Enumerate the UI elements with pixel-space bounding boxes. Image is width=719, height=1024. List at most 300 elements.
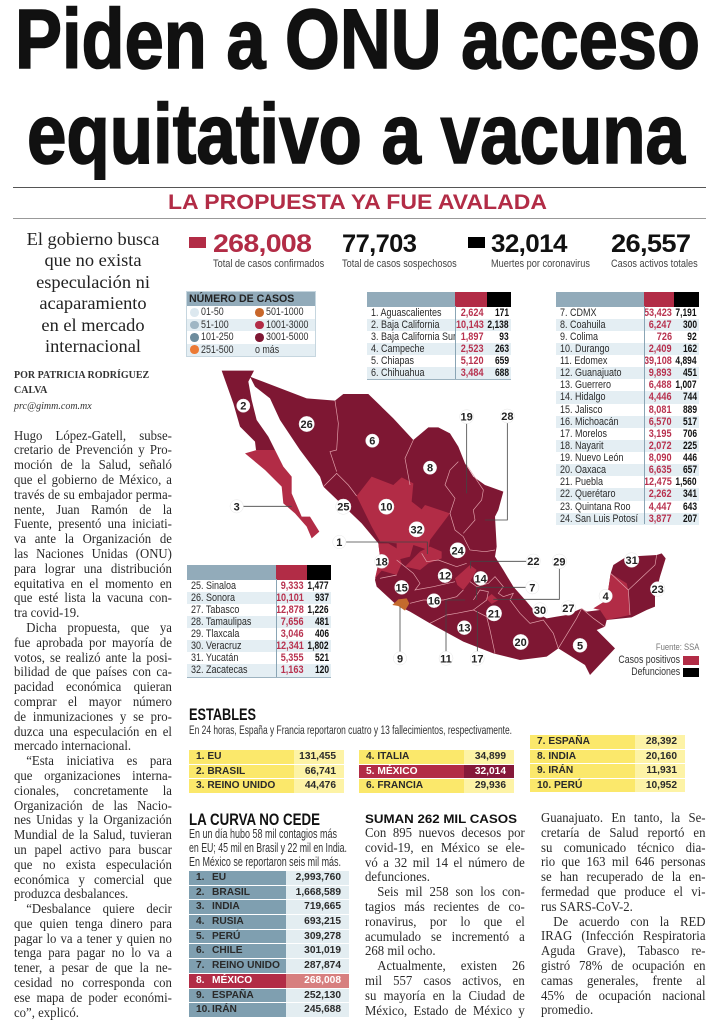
article text column 3: cretaría de Salud reportó en [541,825,706,840]
deck text [27,229,160,356]
table: states 7-24: 16. Michoacán [560,416,619,428]
article text column 2: 268 mil ocho. [365,943,436,958]
article text column 1: moción de la Salud, señaló [14,457,172,472]
article text column 1: cesidad no corresponda con [14,975,172,990]
table: states 7-24: 2,072 [649,440,672,452]
article text column 1: Mundial de la Salud, tuvieran [14,827,172,842]
stat: active cases: Casos activos totales [611,258,698,270]
table: world cases ranking: 245,688 [304,1004,341,1015]
legend: number of cases: o más [255,344,279,356]
table: states 7-24: 3,877 [649,513,672,525]
heading: Suman 262 mil casos: SUMAN 262 MIL CASOS [365,812,517,826]
table: world cases ranking: 287,874 [304,960,341,971]
table: states 25-32: 32. Zacatecas [191,664,248,676]
table: world cases ranking: IRÁN [212,1004,237,1015]
table: states 7-24: 12,475 [644,476,672,488]
table: states 25-32: 7,656 [281,616,304,628]
stat: deaths: 32,014 [491,230,567,258]
table: states 7-24 [556,292,699,525]
article text column 1: cretario de Prevención y Pro- [14,442,172,457]
table: states 7-24: 4,447 [649,500,672,512]
table: states 1-6: 1,897 [461,331,484,343]
table: world cases ranking: 7. [196,960,204,971]
table: states 7-24: 8,090 [649,452,672,464]
table: states 25-32: 25. Sinaloa [191,580,236,592]
article text column 1: produzca desbalances. [14,886,128,901]
map: Colima [392,598,409,611]
deck text: acaparamiento [39,293,147,313]
byline: POR PATRICIA RODRÍGUEZ [14,370,149,381]
map: state numbers: 16 [428,596,440,608]
table: states 1-6: 4. Campeche [371,343,425,355]
table: world cases ranking: 693,215 [304,916,341,927]
map: state numbers: 21 [488,608,500,620]
table: states 25-32: 10,101 [276,592,304,604]
table: states 7-24: 4,894 [676,355,697,367]
table: states 7-24: 3,195 [649,428,672,440]
map: state numbers: 14 [475,573,488,585]
table: states 7-24: 39,108 [644,355,672,367]
article text column 1: para lograr una distribución [14,561,172,576]
table: world cases ranking: 268,008 [304,975,341,986]
table: world cases ranking: BRASIL [212,887,250,898]
article text column 1: equitativa en el momento en [14,576,172,591]
table: states 25-32: 29. Tlaxcala [191,628,239,640]
table: world cases ranking: 4. [196,916,204,927]
table: states 1-6: 10,143 [456,319,484,331]
table: states 1-6: 171 [495,306,509,318]
table: states 7-24: 6,635 [649,464,672,476]
table: deaths ranking 1-3: 1. EU [196,751,221,762]
table: states 7-24: 19. Nuevo León [560,452,624,464]
table: states 7-24: 8,081 [649,404,672,416]
article text column 2: vó a 32 mil 14 el número de [365,855,525,870]
table: world cases ranking: 2,993,760 [296,872,341,883]
map: state numbers: 27 [562,603,574,615]
map: state numbers: 19 [461,412,473,424]
table: states 7-24: 2,262 [649,488,672,500]
legend: number of cases [187,292,315,356]
article text column 2: tagios más recientes de co- [365,899,525,914]
byline: prc@gimm.com.mx [14,401,92,412]
table: states 1-6: 2,624 [461,306,484,318]
table: states 7-24: 6,570 [649,416,672,428]
stat: confirmed cases: Total de casos confirmados [213,258,324,270]
article text column 3: IRAG (Infección Respiratoria [541,928,706,943]
map: state numbers: 10 [380,502,392,514]
deck text: especulación ni [36,272,150,292]
table: world cases ranking: 6. [196,945,204,956]
legend: number of cases: 251-500 [201,344,234,356]
table: deaths ranking 7-10: 7. ESPAÑA [537,736,590,747]
article text column 1: votos, se realizó ante la posi- [14,650,172,665]
article text column 1: “Desbalance quiere decir [26,901,172,916]
table: states 7-24: 2,409 [649,343,672,355]
article text column 3: De acuerdo con la RED [553,914,706,929]
map: state numbers: 30 [534,605,546,617]
map: state numbers: 20 [515,637,527,649]
table: deaths ranking 1-3 [189,750,344,793]
table: states 25-32: 120 [315,664,329,676]
article text column 1: mercado internacional. [14,738,131,753]
byline: CALVA [14,385,47,396]
map: state numbers: 9 [397,653,403,665]
stat: active cases: 26,557 [611,230,690,258]
article text column 1: pacidad económica quieran [14,679,172,694]
stat: suspected cases: Total de casos sospechosos [342,258,457,270]
table: states 7-24: 12. Guanajuato [560,367,622,379]
article text column 3: gistró 78% de ocupación en [541,958,706,973]
table: world cases ranking: REINO UNIDO [212,960,280,971]
stat: deaths: Muertes por coronavirus [491,258,590,270]
map: state numbers: 29 [553,556,565,568]
table: states 7-24: 162 [683,343,697,355]
source and map key: Fuente: SSA [655,642,699,653]
article text column 1: comprar el mayor número [14,694,172,709]
table: world cases ranking: PERÚ [212,931,240,942]
table: world cases ranking: 10. [196,1004,210,1015]
legend: number of cases: 101-250 [201,331,234,343]
table: states 1-6: 5,120 [461,355,484,367]
table: world cases ranking: EU [212,872,226,883]
table: world cases ranking: 309,278 [304,931,341,942]
legend: number of cases: 51-100 [201,319,229,331]
table: states 7-24: 14. Hidalgo [560,391,606,403]
table: deaths ranking 4-6: 4. ITALIA [366,751,409,762]
table: states 1-6: 5. Chiapas [371,355,414,367]
article text column 1: duzca una especulación en el [14,724,172,739]
table: world cases ranking: 1. [196,872,204,883]
article text column 3: promedio. [541,1002,593,1017]
deck text: internacional [45,336,141,356]
stat: suspected cases [342,230,457,270]
map: state numbers: 7 [529,582,535,594]
table: world cases ranking: ESPAÑA [212,990,254,1000]
article text column 3: rus SARS-CoV-2. [541,899,633,914]
table: world cases ranking: 5. [196,931,204,942]
table: states 7-24: 13. Guerrero [560,379,611,391]
subtitle: LA PROPUESTA YA FUE AVALADA [168,191,547,214]
table: states 7-24: 1,007 [676,379,697,391]
article text column 3: camas generales, frente al [541,973,706,988]
article text column 1: fue aprobada por mayoría de [14,635,172,650]
title [15,0,700,180]
article text column 1: tener, a pesar de que la ne- [14,960,172,975]
table: states 7-24: 92 [688,331,697,343]
map: state numbers: 23 [652,584,664,596]
table: states 7-24: 11. Edomex [560,355,607,367]
table: states 7-24: 21. Puebla [560,476,603,488]
text: La curva subtitle [189,827,347,869]
article text column 1: nente, Juan Ramón de la [14,502,172,517]
table: states 25-32: 30. Veracruz [191,640,242,652]
legend: number of cases: 3001-5000 [266,331,308,343]
table: deaths ranking 1-3: 3. REINO UNIDO [196,780,275,791]
article text column 3: rio que 163 mil 646 personas [541,854,706,869]
table: states 1-6: 1. Aguascalientes [371,306,442,318]
table: states 7-24: 53,423 [644,306,672,318]
table: states 7-24: 18. Nayarit [560,440,604,452]
legend: number of cases: 501-1000 [266,306,304,318]
stat: confirmed cases [189,230,324,270]
table: world cases ranking: 719,665 [304,901,341,912]
stat: active cases [611,230,698,270]
table: deaths ranking 7-10: 10. PERÚ [537,780,582,791]
table: deaths ranking 7-10 [530,735,685,792]
table: states 7-24: 17. Morelos [560,428,607,440]
table: states 25-32 [187,565,331,678]
table: deaths ranking 7-10: 10,952 [646,780,677,791]
map: mainland [222,371,666,675]
table: world cases ranking: 252,130 [304,990,341,1000]
table: states 1-6: 263 [495,343,509,355]
stat: confirmed cases: 268,008 [213,230,311,258]
table: states 25-32: 12,878 [276,604,304,616]
table: states 7-24: 4,446 [649,391,672,403]
map: state numbers: 1 [336,537,342,549]
table: states 7-24: 726 [657,331,672,343]
article text column 3: se han recuperado de la en- [541,869,706,884]
article text column 1: económica y comercial que [14,872,172,886]
table: states 7-24: 225 [683,440,697,452]
table: states 7-24: 657 [683,464,697,476]
article text column 1: través de su embajador perma- [14,487,172,502]
article text column 1: de inmunizaciones y se pro- [14,709,172,724]
article text column 1: que organizaciones interna- [14,768,172,783]
article text column 1 [14,428,172,1020]
article text column 1: Fuente, presentó una iniciati- [14,516,172,531]
article text column 1: Hugo López-Gatell, subse- [14,428,172,443]
table: states 25-32: 12,341 [276,640,304,652]
map: state numbers: 24 [452,545,465,557]
article text column 2: Actualmente, existen 26 [377,958,525,973]
source and map key: Casos positivos [618,654,680,666]
article text column 1: “Esta iniciativa es para [26,753,172,768]
table: states 7-24: 6,488 [649,379,672,391]
table: world cases ranking: INDIA [212,901,240,912]
map: state numbers: 12 [439,571,451,583]
map: leader lines [243,423,559,652]
article text column 2: Con 895 nuevos decesos por [365,825,525,840]
table: states 1-6: 2,138 [488,319,509,331]
table: deaths ranking 1-3: 131,455 [299,751,336,762]
map: state numbers: 4 [603,591,610,603]
table: deaths ranking 4-6: 34,899 [475,751,506,762]
table: states 1-6: 2,523 [461,343,484,355]
table: states 1-6: 93 [500,331,509,343]
table: world cases ranking: CHILE [212,945,243,956]
article text column 1: Dicha propuesta, que ya [26,620,172,635]
deck text: que no exista [44,250,142,270]
legend: number of cases: 01-50 [201,306,224,318]
map: state numbers: 18 [376,556,388,568]
article text column 1: que no exista especulación [14,857,172,872]
table: states 7-24: 744 [683,391,697,403]
table: deaths ranking 1-3: 2. BRASIL [196,766,245,777]
article text column 2: México, Estado de México y [365,1003,525,1018]
map: state numbers: 2 [240,401,246,413]
table: deaths ranking 7-10: 8. INDIA [537,751,576,762]
table: world cases ranking: 2. [196,887,204,898]
table: states 1-6: 659 [495,355,509,367]
article text column 1: tenga para pagar no lo va a [14,945,172,960]
table: states 7-24: 23. Quintana Roo [560,500,631,512]
table: states 1-6 [367,292,511,380]
article text column 3: Guanajuato. En tanto, la Se- [541,810,706,825]
table: states 7-24: 24. San Luis Potosí [560,513,638,525]
deck text: El gobierno busca [27,229,159,249]
table: deaths ranking 7-10: 9. IRÁN [537,765,573,776]
article text column 1: las Naciones Unidas (ONU) [14,546,172,561]
article text column 2 [365,825,525,1018]
article text column 3: 45% de ocupación nacional [541,988,706,1003]
map: state borders [323,401,657,653]
table: states 25-32: 28. Tamaulipas [191,616,251,628]
table: states 7-24: 10. Durango [560,343,610,355]
table: states 1-6: 6. Chihuahua [371,367,425,379]
map: state numbers: 25 [337,502,349,514]
map: state numbers: 26 [301,419,313,431]
table: states 1-6: 688 [495,367,509,379]
source and map key: Defunciones [631,666,680,678]
table: world cases ranking: RUSIA [212,916,244,927]
stat: suspected cases: 77,703 [342,230,416,258]
table: states 7-24: 1,560 [676,476,697,488]
table: states 25-32: 3,046 [281,628,304,640]
map: state numbers: 28 [501,411,513,423]
table: states 7-24: 706 [683,428,697,440]
table: deaths ranking 7-10: 20,160 [646,751,677,762]
table: states 7-24: 341 [683,488,697,500]
article text column 2: covid-19, en México se ele- [365,840,525,855]
article text column 1: tra covid-19. [14,605,79,620]
table: deaths ranking 4-6: 5. MÉXICO [366,766,418,777]
table: world cases ranking: 3. [196,901,204,912]
article text column 2: su mayoría en la Ciudad de [365,988,525,1003]
legend: number of cases: NÚMERO DE CASOS [189,293,294,305]
map: state number markers [230,399,665,665]
table: world cases ranking: 1,668,589 [296,887,341,898]
table: world cases ranking [189,871,349,1017]
article text column 2: mil 557 casos activos, en [365,973,525,988]
article text column 1: un papel activo para buscar [14,842,172,857]
deck text: en el mercado [41,315,145,335]
map: state numbers: 15 [396,582,408,594]
table: states 25-32: 31. Yucatán [191,652,238,664]
table: states 25-32: 1,163 [281,664,304,676]
table: deaths ranking 4-6: 29,936 [475,780,506,791]
table: states 7-24: 446 [683,452,697,464]
table: deaths ranking 7-10: 11,931 [646,765,677,776]
article text column 2: defunciones. [365,869,430,884]
table: states 7-24: 517 [683,416,697,428]
table: states 7-24: 9,893 [649,367,672,379]
byline [13,369,149,412]
table: states 7-24: 8. Coahuila [560,319,606,331]
table: deaths ranking 1-3: 44,476 [305,780,336,791]
table: world cases ranking: 9. [196,990,204,1000]
article text column 1: co”, explicó. [14,1005,79,1020]
map: state numbers: 6 [369,436,375,448]
map: state numbers: 13 [458,623,470,635]
article text column 1: que esté lista la vacuna con- [14,590,172,605]
table: states 25-32: 1,477 [308,580,329,592]
article text column 2: acumulado se incrementó a [365,929,525,944]
table: world cases ranking: MÉXICO [212,975,252,986]
map: state numbers: 22 [527,556,539,568]
article text column 2: Seis mil 258 son los con- [377,884,525,899]
table: world cases ranking: 8. [196,975,204,986]
table: states 7-24: 20. Oaxaca [560,464,606,476]
article text column 1: que el gobierno de México, a [14,472,172,487]
map: state numbers: 11 [440,653,452,665]
map: lighter states [245,450,630,620]
article text column 1: pagar lo va a tener y quien no [14,931,172,946]
table: states 7-24: 7. CDMX [560,306,597,318]
article text column 1: Organización de las Nacio- [14,798,172,813]
map: state numbers: 31 [626,555,638,567]
table: states 25-32: 937 [315,592,329,604]
article text column 1: cionales, concretamente la [14,783,172,798]
map: state numbers [234,401,664,665]
table: states 7-24: 451 [683,367,697,379]
table: states 7-24: 15. Jalisco [560,404,603,416]
table: states 25-32: 521 [315,652,329,664]
map: state numbers: 17 [471,653,483,665]
article text column 3: Aguda Grave), Tabasco re- [541,943,706,958]
source and map key [618,642,700,678]
map: state numbers: 3 [234,501,240,513]
table: states 7-24: 300 [683,319,697,331]
table: states 25-32: 1,226 [308,604,329,616]
table: deaths ranking 4-6: 32,014 [475,766,506,777]
table: states 7-24: 9. Colima [560,331,598,343]
legend: number of cases: 1001-3000 [266,319,308,331]
map of Mexico with state labels [222,370,666,675]
table: states 7-24: 889 [683,404,697,416]
table: states 25-32: 481 [315,616,329,628]
table: states 7-24: 643 [683,500,697,512]
article text column 2: ronavirus, por lo que el [365,914,525,929]
table: states 7-24: 6,247 [649,319,672,331]
article text column 3 [541,810,706,1017]
stat: deaths [468,230,590,270]
article text column 1: bilidad de que países con ca- [14,664,172,679]
table: states 7-24: 7,191 [676,306,697,318]
article text column 1: nes Unidas y la Organización [14,812,172,827]
table: states 7-24: 22. Querétaro [560,488,616,500]
article text column 1: va ante la Organización de [14,531,172,546]
table: states 1-6: 2. Baja California [371,319,440,331]
table: states 25-32: 27. Tabasco [191,604,239,616]
table: states 25-32: 9,333 [281,580,304,592]
table: deaths ranking 7-10: 28,392 [646,736,677,747]
table: world cases ranking: 301,019 [304,945,341,956]
table: states 7-24: 207 [683,513,697,525]
article text column 3: su comunicado técnico dia- [541,840,706,855]
article text column 3: fermedad que produce el vi- [541,884,706,899]
table: states 25-32: 26. Sonora [191,592,235,604]
table: deaths ranking 4-6 [359,750,514,793]
table: states 25-32: 5,355 [281,652,304,664]
table: states 25-32: 406 [315,628,329,640]
table: deaths ranking 4-6: 6. FRANCIA [366,780,423,791]
table: deaths ranking 1-3: 66,741 [305,766,336,777]
table: states 1-6: 3. Baja California Sur [371,331,456,343]
article text column 1: que quien tenga dinero para [14,916,172,931]
map: state numbers: 5 [577,640,583,652]
table: states 25-32: 1,802 [308,640,329,652]
